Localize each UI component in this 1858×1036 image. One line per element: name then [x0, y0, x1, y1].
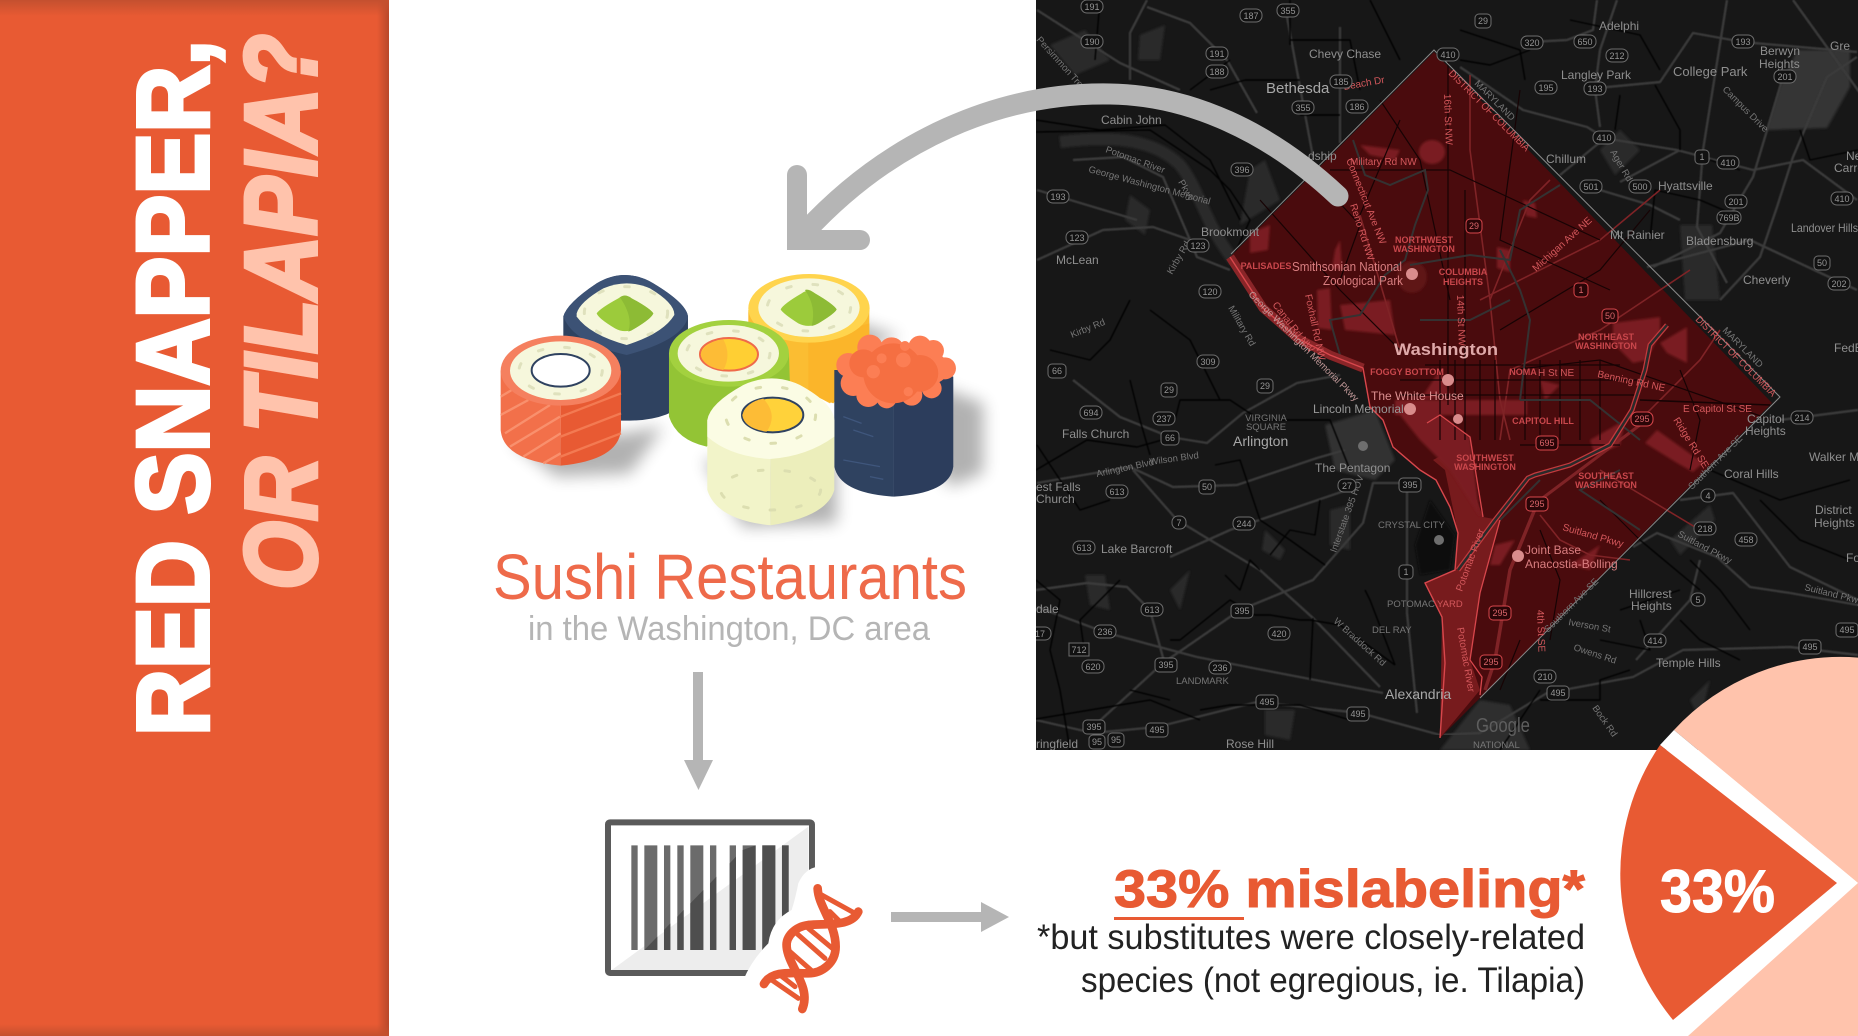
- map: route shields: 694: [1083, 408, 1099, 418]
- map: route shields: 50: [1817, 258, 1827, 268]
- map: DC route shields: 50: [1605, 311, 1615, 321]
- map: DC street labels: Connecticut Ave NW: [1343, 157, 1388, 247]
- callout headline: 33% mislabeling*: [1114, 860, 1585, 919]
- map: Washington labels: The White House: [1371, 389, 1464, 403]
- map: route shields: 95: [1092, 737, 1102, 747]
- map: place labels: Hillcrest: [1629, 587, 1672, 601]
- map: DC route shields: 695: [1539, 438, 1555, 448]
- map: DC dark roads: [1260, 60, 1772, 690]
- map: place labels: College Park: [1673, 64, 1748, 79]
- map: route shields: 396: [1234, 165, 1250, 175]
- map: place labels: Alexandria: [1385, 686, 1451, 702]
- barcode bars: [631, 845, 789, 950]
- map: route shields: 29: [1478, 16, 1488, 26]
- map: route shields: 410: [1834, 194, 1850, 204]
- map: road labels: Wilson Blvd: [1149, 450, 1200, 468]
- map: DC street labels: E Capitol St SE: [1683, 404, 1752, 415]
- map: route shields: 236: [1097, 627, 1113, 637]
- callout: 33 percent mislabeling: [1037, 860, 1585, 1000]
- map: place labels: Mt Rainier: [1610, 228, 1665, 242]
- map: route shields: 191: [1084, 2, 1100, 12]
- map: DC street labels: FOGGY BOTTOM: [1370, 367, 1444, 377]
- map: DC street labels: Foxhall Rd NW: [1302, 293, 1327, 362]
- map: DC street labels: 4th St SE: [1534, 610, 1546, 653]
- map: route shields: 193: [1587, 84, 1603, 94]
- map: route shields: 495: [1259, 697, 1275, 707]
- map: road labels: Potomac River: [1104, 144, 1166, 176]
- map: DC street labels: NORTHWEST: [1395, 235, 1453, 245]
- callout underline: [1114, 917, 1244, 920]
- map: route shields: 190: [1084, 37, 1100, 47]
- pie chart: 33 percent: [1620, 657, 1858, 1036]
- map: route shields: 123: [1069, 233, 1085, 243]
- map: place labels: Cheverly: [1743, 273, 1790, 287]
- map: route shields: 712: [1071, 645, 1087, 655]
- map: road labels: Kirby Rd: [1069, 317, 1107, 341]
- map: route shields: 395: [1234, 606, 1250, 616]
- map: Washington labels: Joint Base: [1525, 543, 1581, 557]
- map: route shields: 495: [1802, 642, 1818, 652]
- map: road labels: Bock Rd: [1590, 703, 1619, 739]
- map: DC street labels: WASHINGTON: [1575, 341, 1637, 351]
- map: DC street labels: CAPITOL HILL: [1512, 416, 1574, 426]
- icon: DNA barcode: [608, 822, 872, 1023]
- map: road labels: Interstate 395 HOV: [1328, 473, 1367, 554]
- map: route shields: 185: [1333, 77, 1349, 87]
- map: DC street labels: Reno Rd NW: [1347, 203, 1376, 262]
- map: place labels: Heights: [1759, 57, 1800, 71]
- map: place labels: Coral Hills: [1724, 467, 1779, 481]
- map: road labels: Arlington Blvd: [1095, 457, 1155, 480]
- map: DC street labels: Ridge Rd SE: [1670, 416, 1711, 471]
- map: place labels: ringfield: [1036, 737, 1078, 751]
- map: Rock Creek trail: [1330, 140, 1640, 530]
- map: Potomac river in DC: [1425, 447, 1500, 738]
- map: road labels: Kirby Rd: [1165, 239, 1193, 276]
- white cutout: [743, 867, 872, 1023]
- map: DC street labels: 16th St NW: [1441, 94, 1454, 146]
- map: Washington labels: Washington: [1394, 340, 1498, 359]
- map: route shields: 495: [1839, 625, 1855, 635]
- map: route shields: 210: [1537, 672, 1553, 682]
- map: route shields: 1: [1699, 152, 1705, 162]
- map: DC boundary line: [1231, 50, 1780, 698]
- map: road labels: MARYLAND: [1720, 325, 1765, 370]
- map: road labels: Persimmon Tree Rd: [1034, 35, 1098, 105]
- map: route shields: [1029, 0, 1858, 749]
- map: DC street labels: DISTRICT OF COLUMBIA: [1693, 314, 1778, 399]
- map: DC street labels: [1241, 68, 1778, 694]
- map: DC route shields: 295: [1492, 608, 1508, 618]
- map: place labels: Gre: [1830, 39, 1850, 53]
- sushi: cream roll: [707, 378, 834, 525]
- map: Potomac west bank: [1230, 257, 1363, 368]
- sushi: green roll: [669, 320, 790, 447]
- map: route shields: 123: [1190, 241, 1206, 251]
- map: DC street labels: WASHINGTON: [1575, 480, 1637, 490]
- map: DC street labels: 14th St NW: [1454, 295, 1467, 347]
- map: road labels: W Braddock Rd: [1331, 616, 1388, 669]
- map: place labels: Capitol: [1747, 412, 1784, 426]
- map: route shields: 395: [1086, 722, 1102, 732]
- map: route shields: 5: [1695, 595, 1701, 605]
- panel: left title band: [0, 0, 389, 1036]
- map: Washington labels: [1292, 259, 1618, 571]
- map: DC street labels: NORTHEAST: [1578, 332, 1635, 342]
- map: route shields: 29: [1164, 385, 1174, 395]
- map: place labels: The Pentagon: [1315, 461, 1390, 475]
- map: Washington labels: Smithsonian National: [1292, 259, 1402, 274]
- map: road labels: George Washington Memorial: [1087, 164, 1212, 207]
- map: DC street labels: SOUTHWEST: [1456, 453, 1514, 463]
- map: parks: [1250, 140, 1703, 570]
- map: Potomac east bank: [1427, 415, 1500, 695]
- map: place labels: Falls Church: [1062, 427, 1129, 441]
- heading: sushi restaurants: Sushi Restaurants: [493, 541, 967, 613]
- map: DC route shields: 295: [1483, 657, 1499, 667]
- map: route shields: 17: [1035, 629, 1045, 639]
- map: DC street labels: WASHINGTON: [1454, 462, 1516, 472]
- map: DC route shields: 1: [1578, 285, 1584, 295]
- icon: sushi rolls: [501, 274, 983, 527]
- map: DC street labels: George Washington Memorial Pkwy: [1246, 289, 1361, 404]
- map: route shields: 244: [1236, 519, 1252, 529]
- map: place labels: Arlington: [1233, 433, 1288, 449]
- map: place labels: Chillum: [1546, 152, 1586, 166]
- map: road labels: MARYLAND: [1472, 78, 1517, 123]
- map: DC red overlay: [1230, 52, 1772, 738]
- map: DC route shields: 295: [1529, 499, 1545, 509]
- map: route shields: 218: [1697, 524, 1713, 534]
- map: DC route shields: [1466, 219, 1653, 669]
- barcode frame: [608, 822, 812, 973]
- map: road labels: Southern Ave SE: [1686, 433, 1745, 492]
- map: route shields: 236: [1212, 663, 1228, 673]
- map: place labels: Temple Hills: [1656, 656, 1721, 670]
- map: route shields: 188: [1209, 67, 1225, 77]
- map: route shields: 420: [1271, 629, 1287, 639]
- map: place labels: SQUARE: [1246, 422, 1286, 433]
- map: route shields: 355: [1295, 103, 1311, 113]
- map: route shields: 769B: [1718, 213, 1740, 223]
- map: place labels: Berwyn: [1760, 44, 1800, 58]
- map: route shields: 613: [1144, 605, 1160, 615]
- map: route shields: 495: [1550, 688, 1566, 698]
- map: Anacostia river: [1458, 325, 1667, 570]
- map: DC street labels: HEIGHTS: [1443, 277, 1483, 287]
- map: place labels: Lake Barcroft: [1101, 542, 1173, 556]
- map: Potomac river upper: [1060, 139, 1235, 262]
- map: route shields: 187: [1243, 11, 1259, 21]
- map: route shields: 214: [1794, 413, 1810, 423]
- map: highways: [1036, 0, 1858, 735]
- map: place labels: dale: [1036, 602, 1059, 616]
- map: route shields: 495: [1350, 709, 1366, 719]
- map: DC street labels: Beach Dr: [1343, 75, 1386, 93]
- map: route shields: 95: [1111, 735, 1121, 745]
- arrow: down to barcode: [684, 672, 713, 790]
- map: place labels: LANDMARK: [1176, 676, 1229, 687]
- map: place labels: Cabin John: [1101, 113, 1162, 127]
- map: route shields: 191: [1209, 49, 1225, 59]
- map: road labels: Military Rd: [1225, 304, 1257, 348]
- map: route shields: 613: [1076, 543, 1092, 553]
- map: place labels: Hyattsville: [1658, 179, 1713, 193]
- map: route shields: 66: [1052, 366, 1062, 376]
- sushi: yellow roll with avocado: [748, 274, 870, 403]
- map: place labels: Chevy Chase: [1309, 47, 1381, 61]
- map: route shields: 201: [1777, 72, 1793, 82]
- map: DC street labels: PALISADES: [1241, 261, 1291, 271]
- map: Washington labels: Lincoln Memorial: [1313, 402, 1404, 416]
- map: road labels: Campus Drive: [1720, 84, 1770, 135]
- map: route shields: 500: [1632, 182, 1648, 192]
- map: place labels: Heights: [1631, 599, 1672, 613]
- sushi shadows: [510, 317, 983, 527]
- map: route shields: 309: [1200, 357, 1216, 367]
- map: place labels: NATIONAL: [1473, 740, 1520, 751]
- map: route shields: 195: [1538, 83, 1554, 93]
- map: DC street labels: H St NE: [1538, 368, 1574, 379]
- map: route shields: 410: [1720, 158, 1736, 168]
- map: DC street labels: COLUMBIA: [1439, 267, 1488, 277]
- map: DC street labels: WASHINGTON: [1393, 244, 1455, 254]
- map: place labels: Rose Hill: [1226, 737, 1274, 751]
- sushi: navy roll with roe: [834, 370, 953, 497]
- map: route shields: 495: [1149, 725, 1165, 735]
- map: route shields: 237: [1156, 414, 1172, 424]
- map: route shields: 620: [1085, 662, 1101, 672]
- arrow: right to result: [891, 902, 1009, 932]
- map: route shields: 613: [1109, 487, 1125, 497]
- map: place labels: Heights: [1745, 424, 1786, 438]
- map: DC street labels: NOMA: [1509, 367, 1537, 377]
- map: road labels: Ager Rd: [1607, 148, 1634, 184]
- subheading: location: in the Washington, DC area: [528, 610, 930, 648]
- pie gap: white chevron: [1660, 730, 1858, 883]
- pie slice: orange wedge: [1620, 745, 1837, 1020]
- panel: map of Washington DC: [1029, 0, 1858, 751]
- map: place labels: Bladensburg: [1686, 234, 1753, 248]
- map: Washington labels: Anacostia-Bolling: [1525, 557, 1618, 571]
- map: road labels: Southern Ave SE: [1542, 576, 1601, 635]
- map: route shields: 201: [1728, 197, 1744, 207]
- map: route shields: 458: [1738, 535, 1754, 545]
- map: route shields: 414: [1647, 636, 1663, 646]
- sushi: roe topping: [836, 335, 956, 408]
- map: place labels: VIRGINIA: [1245, 413, 1288, 424]
- map: place labels: Google: [1476, 715, 1530, 737]
- map: road labels: Suitland Pkwy: [1676, 529, 1734, 567]
- map: DC street labels: Benning Rd NE: [1596, 369, 1666, 394]
- map: route shields: 7: [1176, 518, 1182, 528]
- map: route shields: 50: [1202, 482, 1212, 492]
- map: place labels: District: [1815, 503, 1852, 517]
- map: DC street labels: DISTRICT OF COLUMBIA: [1446, 68, 1532, 154]
- map: route shields: 650: [1577, 37, 1593, 47]
- map: route shields: 395: [1158, 660, 1174, 670]
- map: DC route shields: 295: [1634, 414, 1650, 424]
- map: route shields: 395: [1402, 480, 1418, 490]
- map: route shields: 120: [1202, 287, 1218, 297]
- map: place labels: est Falls: [1036, 480, 1081, 494]
- map: route shields: 501: [1583, 182, 1599, 192]
- map: place labels: DEL RAY: [1372, 625, 1412, 636]
- map: route shields: 1: [1403, 567, 1409, 577]
- map: route shields: 212: [1609, 51, 1625, 61]
- map: road labels: [1034, 35, 1858, 739]
- arrow: curved from map to sushi: [797, 94, 1338, 240]
- map: road labels: Pkwy: [1175, 178, 1196, 203]
- map: Washington labels: Zoological Park: [1323, 273, 1403, 288]
- map: route shields: 193: [1050, 192, 1066, 202]
- map: route shields: 27: [1342, 481, 1352, 491]
- map: route shields: 4: [1705, 491, 1711, 501]
- map: land patches: [1050, 25, 1850, 750]
- map: DC route shields: 29: [1469, 221, 1479, 231]
- map: place labels: Bethesda: [1266, 80, 1330, 97]
- map: place labels: Church: [1036, 492, 1075, 506]
- map: route shields: 410: [1440, 50, 1456, 60]
- map: route shields: 410: [1596, 133, 1612, 143]
- map: route shields: 29: [1260, 381, 1270, 391]
- map: place labels: Adelphi: [1599, 19, 1639, 33]
- map: route shields: 193: [1735, 37, 1751, 47]
- callout: 33 percent mislabeling: species (not egregious, ie. Tilapia): [1081, 961, 1585, 1000]
- callout note: *but substitutes were closely-related: [1037, 918, 1585, 957]
- map: DC street labels: SOUTHEAST: [1578, 471, 1634, 481]
- map: DC street labels: Potomac River: [1454, 627, 1476, 694]
- map: DC street labels: Suitland Pkwy: [1561, 522, 1625, 550]
- map: road labels: Iverson St: [1567, 617, 1612, 635]
- map: place labels: Langley Park: [1561, 68, 1632, 82]
- map: place labels: dship: [1308, 149, 1337, 163]
- map: place labels: [1036, 19, 1858, 751]
- map: place labels: CRYSTAL CITY: [1378, 520, 1446, 531]
- map: place labels: POTOMAC: [1387, 599, 1435, 610]
- map: place labels: YARD: [1437, 599, 1463, 610]
- map: DC street labels: Canal Rd NW: [1270, 300, 1316, 355]
- map: place labels: Brookmont: [1201, 225, 1260, 239]
- DNA helix: [764, 888, 858, 1009]
- sushi: salmon roll: [501, 336, 621, 466]
- map: road labels: Owens Rd: [1572, 642, 1618, 667]
- map: route shields: 202: [1831, 279, 1847, 289]
- map: DC light roads: [1360, 75, 1720, 690]
- map: place labels: McLean: [1056, 253, 1099, 267]
- map: DC street labels: Michigan Ave NE: [1531, 215, 1595, 274]
- map: route shields: 355: [1280, 6, 1296, 16]
- sushi: navy roll with avocado: [563, 275, 688, 421]
- map: place labels: Heights: [1814, 516, 1855, 530]
- map: DC street labels: Potomac River: [1454, 527, 1487, 593]
- pie label: 33%: [1660, 858, 1775, 925]
- map: DC street labels: Military Rd NW: [1350, 157, 1417, 168]
- map: route shields: 320: [1524, 38, 1540, 48]
- map: minor roads: [1030, 0, 1858, 750]
- map: route shields: 186: [1349, 102, 1365, 112]
- map: route shields: 66: [1165, 433, 1175, 443]
